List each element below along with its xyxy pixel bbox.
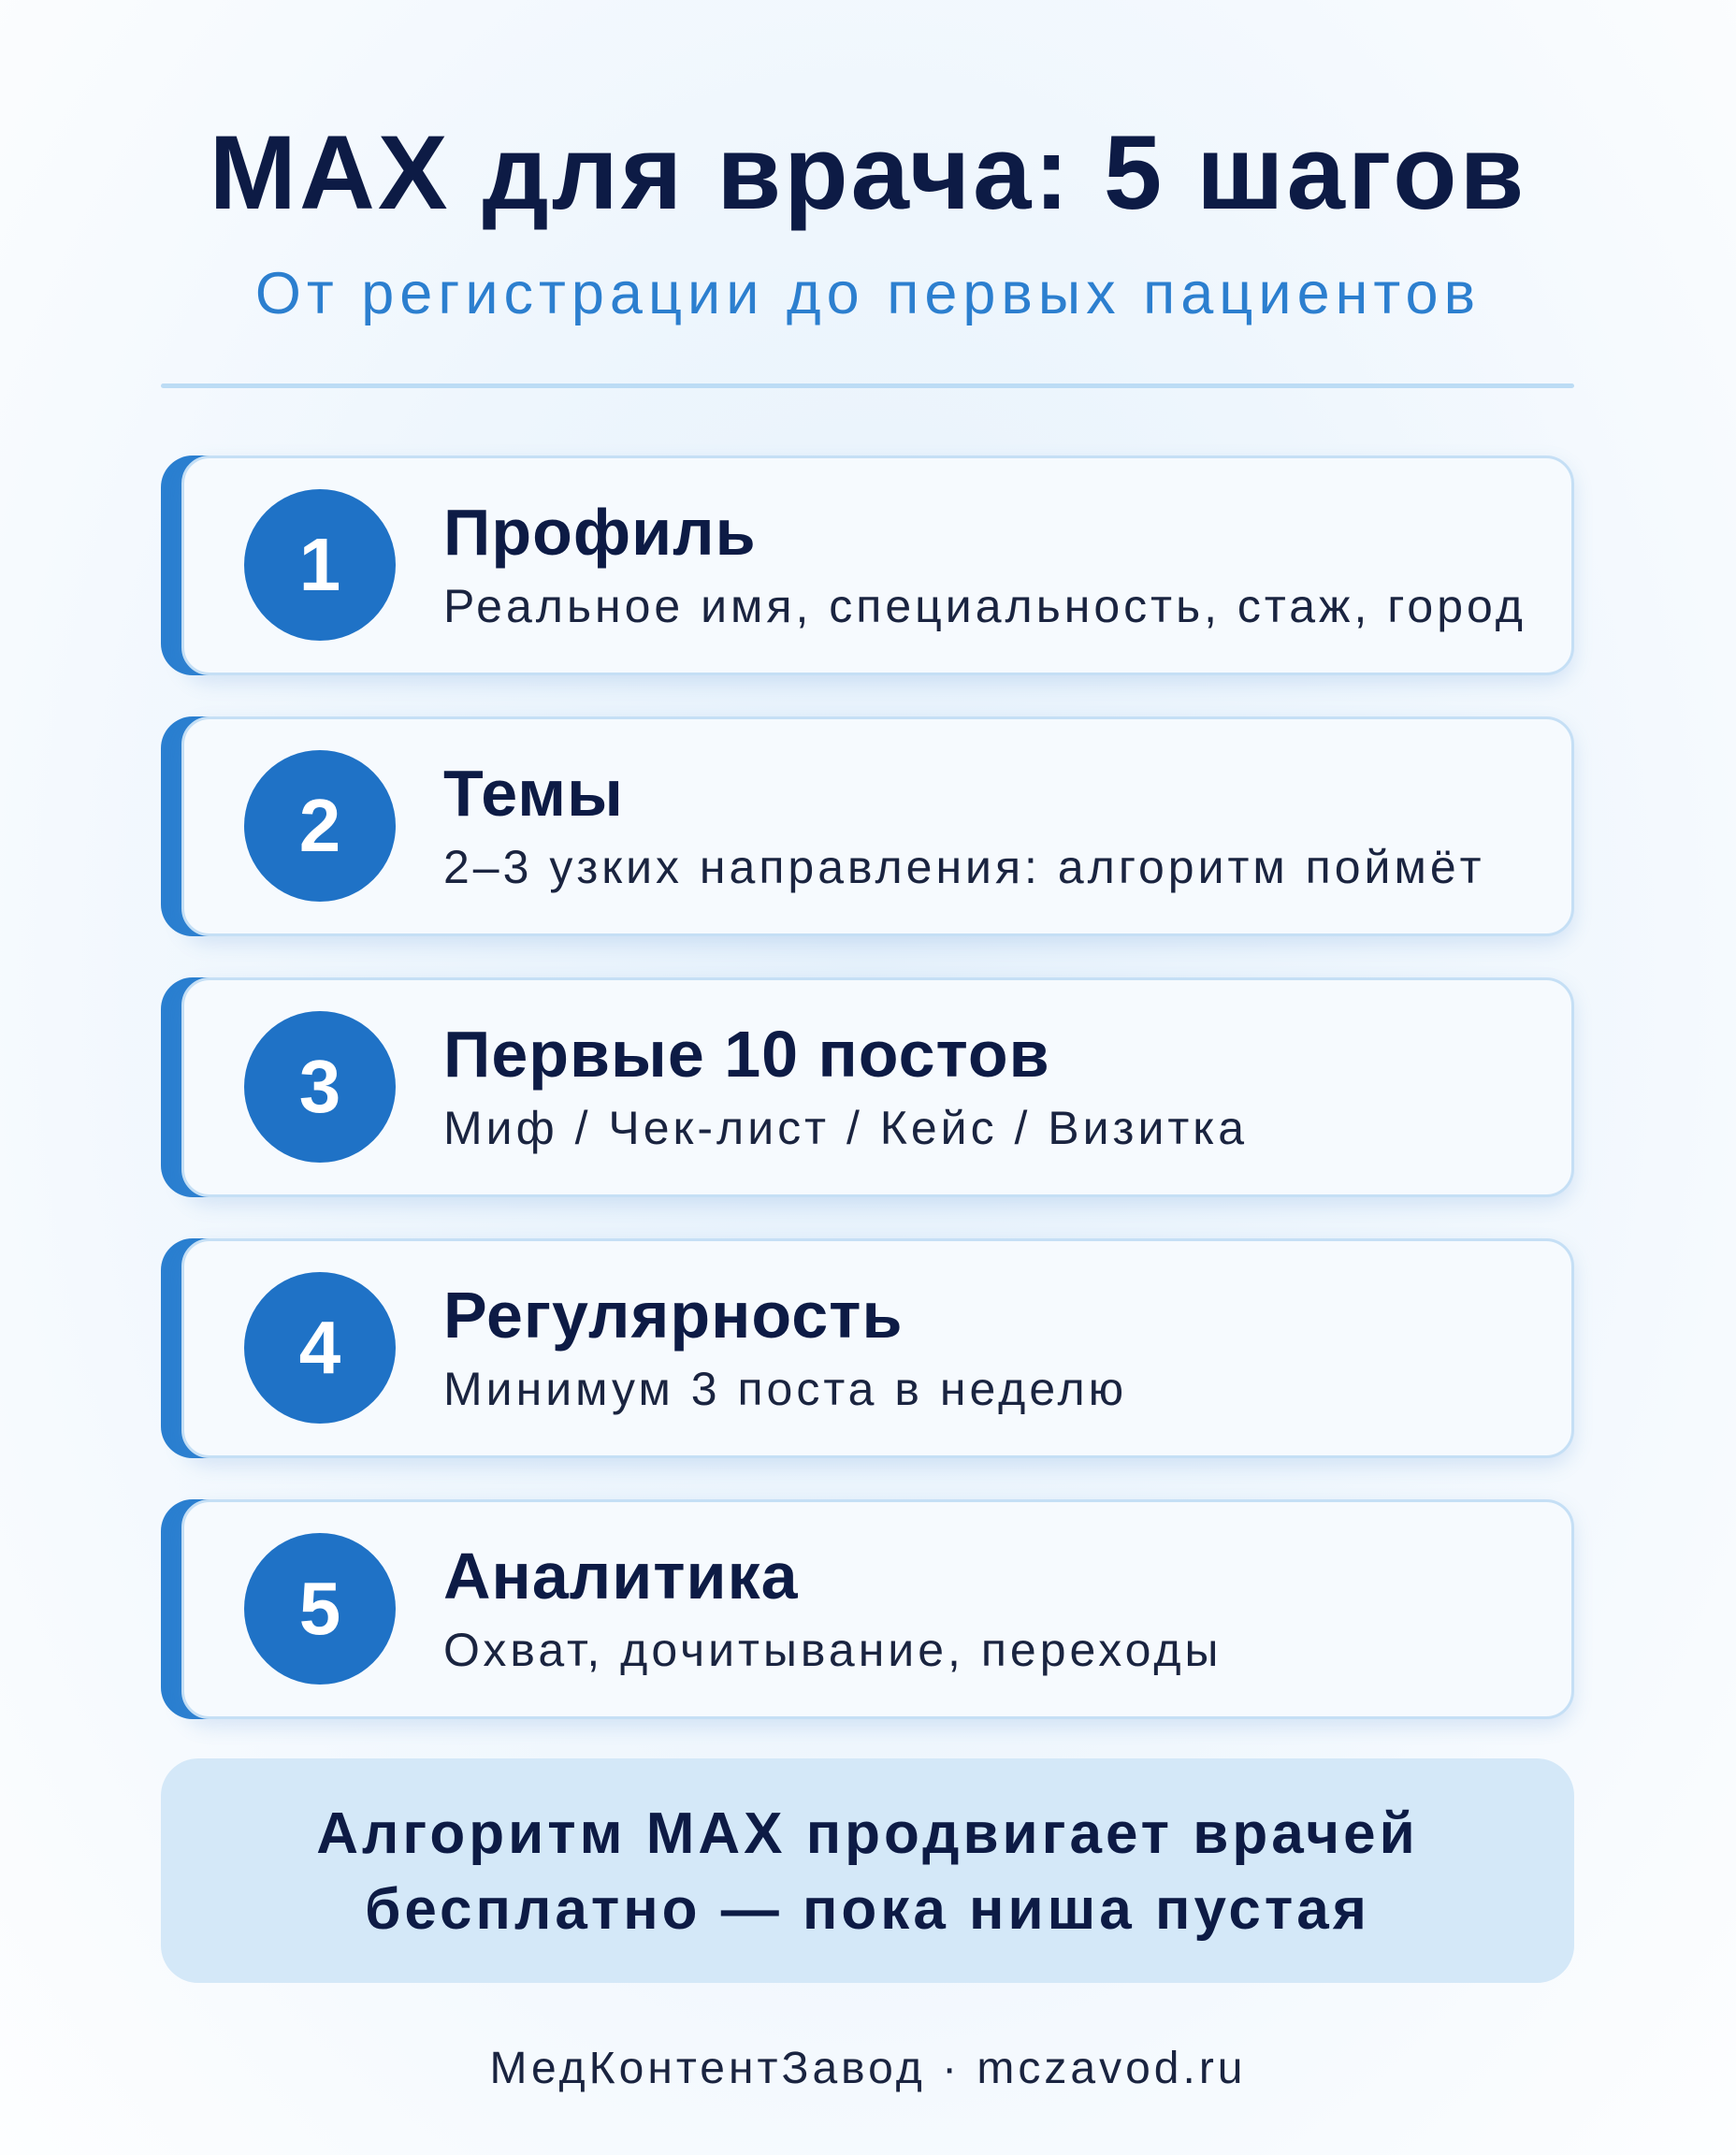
callout: бесплатно — пока ниша пустая: [365, 1877, 1370, 1942]
badge 3: 3: [299, 1045, 340, 1128]
badge 5: 5: [299, 1567, 340, 1650]
callout: [161, 1758, 1574, 1983]
badge 5: [244, 1533, 396, 1685]
text 3: Миф / Чек-лист / Кейс / Визитка: [443, 1102, 1248, 1154]
text 2: 2–3 узких направления: алгоритм поймёт: [443, 841, 1485, 893]
badge 2: [244, 750, 396, 902]
callout: Алгоритм MAX продвигает врачей: [316, 1801, 1419, 1866]
badge 3: [244, 1011, 396, 1163]
subtitle: От регистрации до первых пациентов: [255, 261, 1481, 326]
badge 1: 1: [299, 523, 340, 606]
card: step 1: [161, 456, 1581, 688]
card: step 2: [161, 716, 1581, 950]
badge 4: [244, 1272, 396, 1424]
badge 4: 4: [299, 1306, 340, 1389]
heading 1: Профиль: [443, 496, 757, 569]
text 5: Охват, дочитывание, переходы: [443, 1624, 1222, 1676]
heading 3: Первые 10 постов: [443, 1018, 1050, 1091]
text 4: Минимум 3 поста в неделю: [443, 1363, 1127, 1415]
title: MAX для врача: 5 шагов: [210, 114, 1526, 231]
heading 4: Регулярность: [443, 1279, 903, 1352]
badge 2: 2: [299, 784, 340, 867]
footer: МедКонтентЗавод · mczavod.ru: [489, 2044, 1246, 2093]
card: step 5: [161, 1499, 1581, 1732]
heading 5: Аналитика: [443, 1540, 799, 1613]
text 1: Реальное имя, специальность, стаж, город: [443, 580, 1526, 632]
heading 2: Темы: [443, 757, 624, 830]
badge 1: [244, 489, 396, 641]
card: step 3: [161, 977, 1581, 1210]
card: step 4: [161, 1238, 1581, 1472]
